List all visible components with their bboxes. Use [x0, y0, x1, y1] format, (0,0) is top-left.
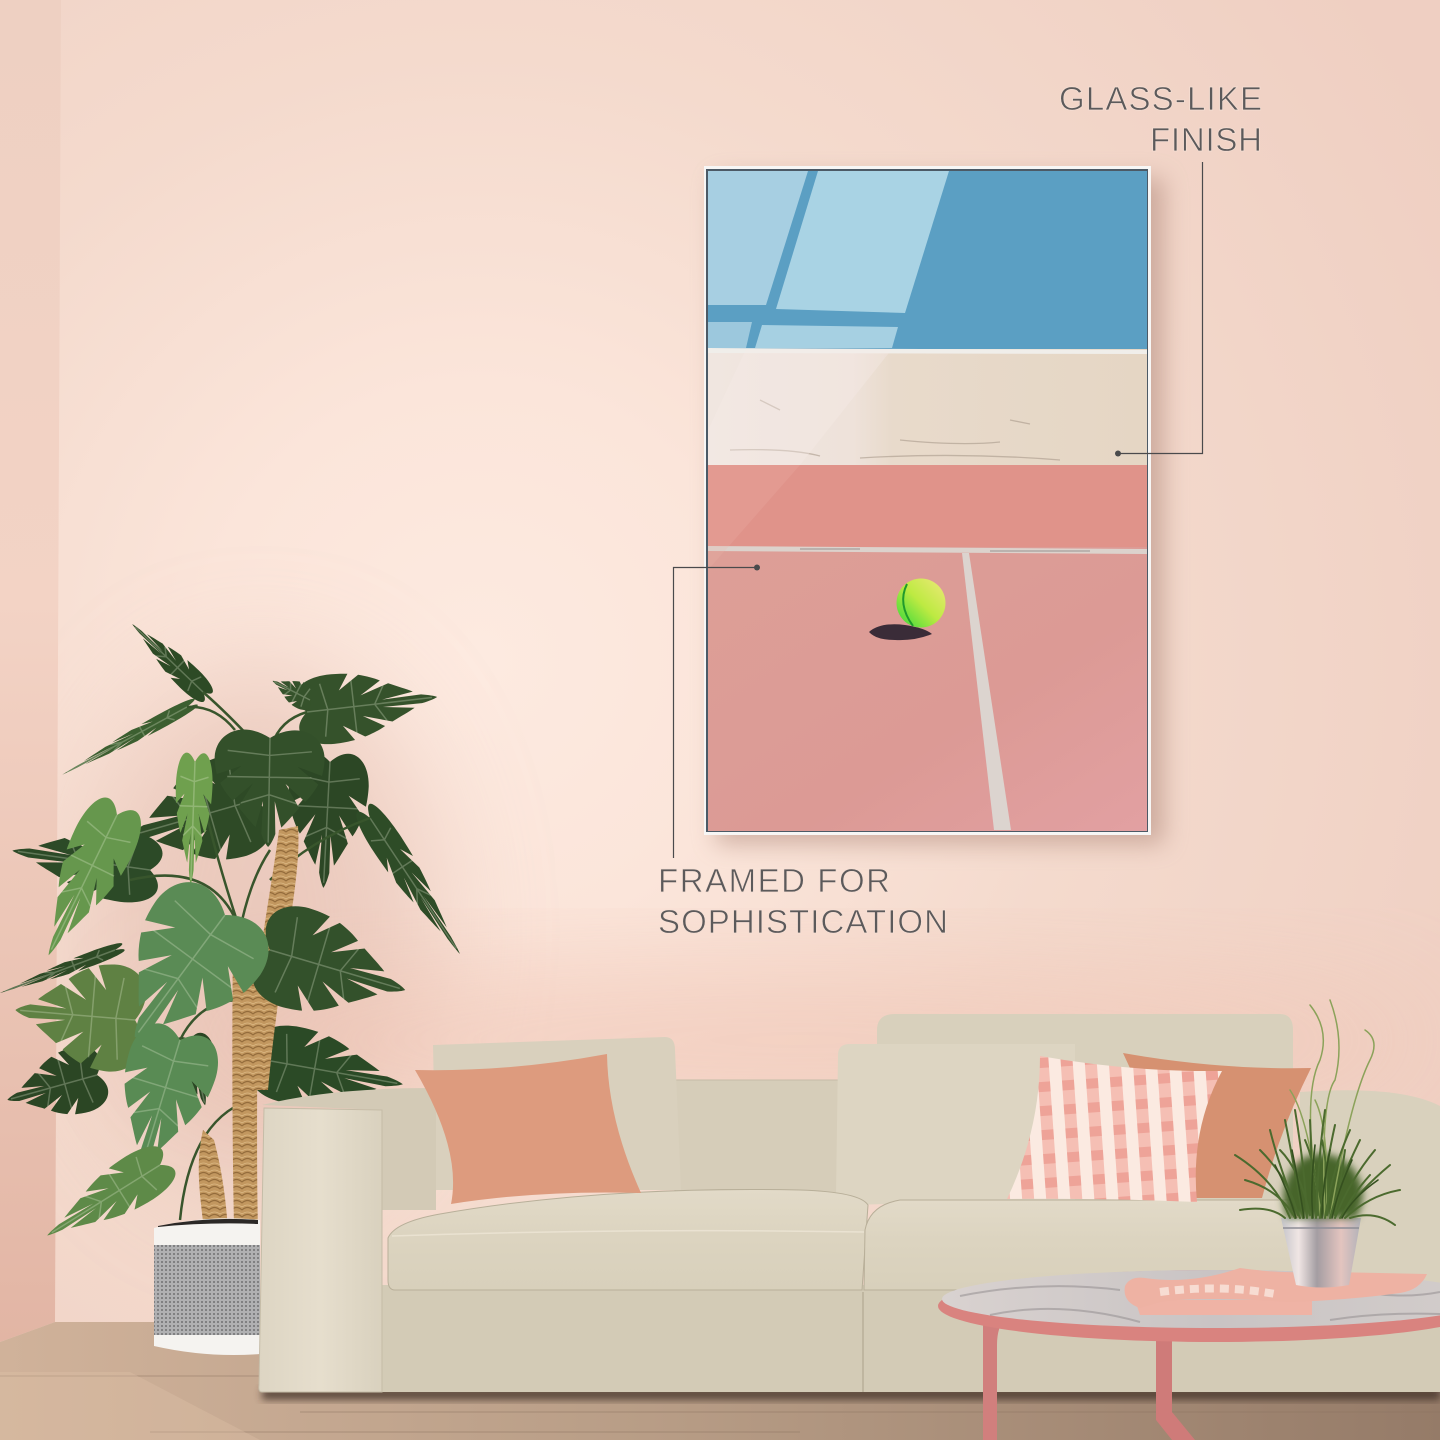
dark inner edge — [706, 169, 1148, 832]
seat cushion left — [388, 1190, 868, 1290]
painting: band top line — [708, 348, 1147, 354]
folded pink cloth — [1135, 1300, 1312, 1315]
frame shadow — [716, 178, 1164, 844]
painting: band texture — [730, 400, 1060, 460]
glass reflection panes — [708, 171, 949, 570]
left back cushion — [433, 1037, 681, 1190]
callout: framed for sophistication: SOPHISTICATION — [658, 903, 948, 940]
left arm top — [262, 1088, 436, 1210]
table leg left — [983, 1318, 1006, 1440]
sofa — [259, 1014, 1440, 1400]
framed artwork — [704, 166, 1164, 844]
right orange pillow — [1123, 1053, 1311, 1198]
cloth draped part — [1125, 1268, 1427, 1308]
table rim — [938, 1270, 1440, 1342]
painting: blue wall — [708, 171, 1147, 349]
floor — [0, 1322, 1440, 1440]
side wall — [0, 0, 61, 1342]
base divider — [862, 1292, 864, 1392]
striped pillow — [1007, 1056, 1222, 1202]
seat cushion left front seam — [392, 1231, 864, 1236]
wall shading — [90, 670, 1440, 1190]
trunks — [199, 826, 298, 1230]
callout: glass-like finish: GLASS-LIKE — [1059, 80, 1262, 117]
callout: glass-like finish — [1059, 80, 1262, 456]
stems — [130, 692, 370, 1220]
floor shadow under sofa — [262, 1388, 1440, 1400]
table leg centre — [1156, 1335, 1195, 1440]
left arm front — [259, 1108, 382, 1392]
left orange pillow — [415, 1054, 641, 1204]
painting: cream wall band — [708, 349, 1147, 466]
upper back cushion — [877, 1014, 1293, 1200]
tennis ball — [896, 578, 946, 628]
table grass plant — [1235, 1000, 1400, 1225]
painting: upper court — [708, 465, 1147, 547]
potted monstera plant — [0, 615, 473, 1355]
right arm — [1300, 1090, 1440, 1392]
callout: framed for sophistication — [658, 564, 948, 940]
back dark leaves — [0, 615, 473, 1132]
planter — [154, 1218, 260, 1355]
painting: lower court — [708, 547, 1147, 831]
middle back — [675, 1080, 840, 1195]
callout: framed for sophistication: FRAMED FOR — [658, 862, 890, 899]
tennis ball shadow — [869, 624, 932, 640]
white frame — [704, 166, 1151, 835]
painting: horizontal court line — [708, 546, 1147, 554]
marble top — [942, 1270, 1440, 1328]
callout: glass-like finish: FINISH — [1150, 121, 1262, 158]
lower sofa base — [380, 1285, 1440, 1392]
metal pot — [1281, 1218, 1361, 1288]
marble veins — [960, 1286, 1440, 1322]
front dark and mid leaves — [11, 729, 420, 1257]
painting: vertical court line — [962, 553, 1011, 830]
right back cushion — [836, 1044, 1075, 1205]
seat cushion right — [864, 1200, 1300, 1290]
coffee table — [938, 1000, 1440, 1440]
